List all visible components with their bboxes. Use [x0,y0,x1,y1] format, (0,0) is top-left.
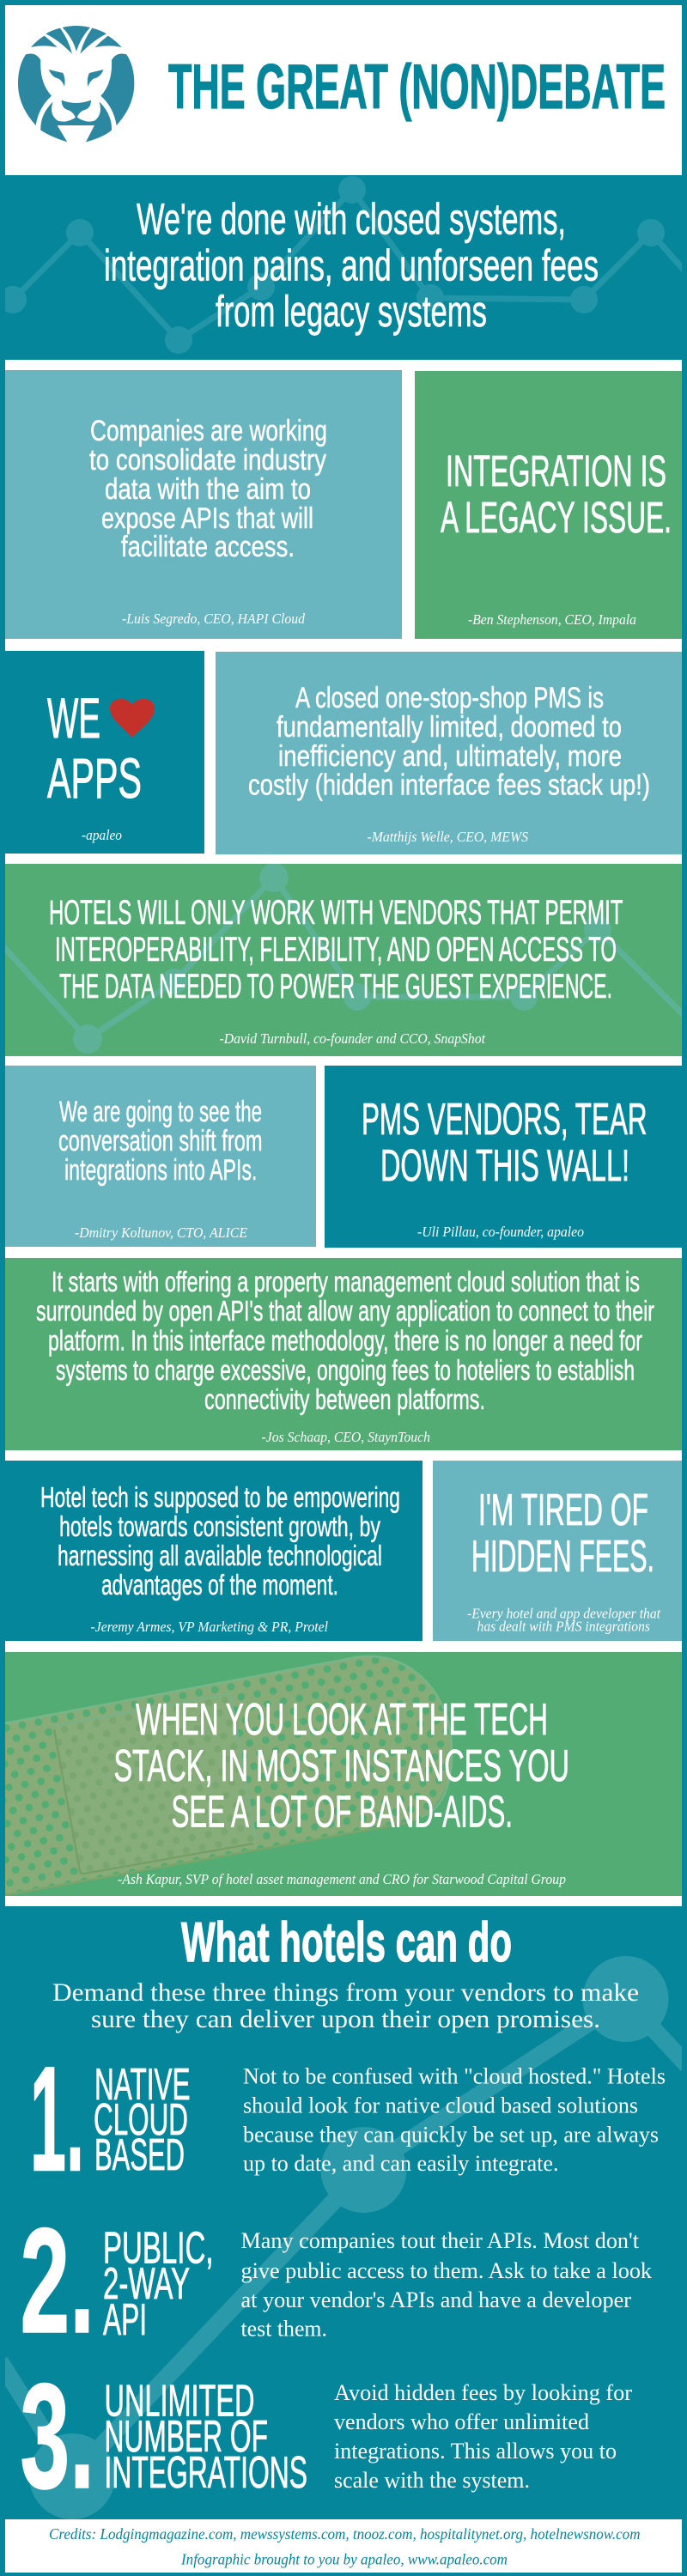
item heading: 2-WAY [103,2259,190,2309]
quote text: harnessing all available technological [58,1540,382,1571]
panel: Uli Pillau quote [325,1066,682,1248]
item description: because they can quickly be set up, are always [243,2123,659,2147]
quote text [441,447,672,542]
icon: band-aid [0,1656,452,1896]
heading: What hotels can do [181,1911,512,1973]
item heading: NUMBER OF [105,2412,268,2462]
header panel [5,5,682,175]
item description: scale with the system. [334,2468,530,2493]
quote text: data with the aim to [105,473,311,506]
quote text: WE [47,686,100,750]
item 1: native cloud based: 1. [30,2035,84,2202]
quote text: advantages of the moment. [101,1569,338,1601]
quote text: integrations into APIs. [64,1154,258,1187]
attribution: -Luis Segredo, CEO, HAPI Cloud [122,611,305,627]
item description: Many companies tout their APIs. Most don't [240,2228,640,2253]
attribution [467,1606,661,1635]
panel: hidden fees quote [433,1461,682,1641]
attribution: has dealt with PMS integrations [477,1618,650,1635]
number 2: 2. [21,2196,94,2364]
attribution: -Jeremy Armes, VP Marketing & PR, Protel [91,1619,328,1635]
attribution: -Ben Stephenson, CEO, Impala [468,611,636,628]
credits text: Credits: Lodgingmagazine.com, mewssystems.com, tnooz.com, hospitalitynet.org, hotelnewsnow.com [49,2525,641,2543]
item description: should look for native cloud based solutions [243,2093,638,2117]
quote text: to consolidate industry [89,444,326,477]
quote text [248,682,650,802]
item heading: BASED [94,2130,185,2180]
item description: Avoid hidden fees by looking for [334,2380,632,2405]
quote text [89,415,327,563]
quote text: conversation shift from [58,1125,263,1157]
panel: Ben Stephenson quote [415,371,682,639]
panel: band-aids quote [0,1652,682,1896]
item description: integrations. This allows you to [334,2439,617,2464]
attribution: -Matthijs Welle, CEO, MEWS [368,829,528,845]
item 2: public 2-way API [21,2196,652,2364]
item description [334,2380,632,2493]
item heading: CLOUD [94,2095,188,2145]
attribution: -Uli Pillau, co-founder, apaleo [417,1224,584,1240]
item heading [94,2060,191,2180]
item description: test them. [240,2317,327,2341]
item description: Not to be confused with "cloud hosted." Hotels [243,2064,666,2088]
panel: Jos Schaap quote [5,1258,682,1450]
quote text [471,1485,654,1582]
quote text: inefficiency and, ultimately, more [278,740,622,773]
quote text: APPS [47,746,142,810]
panel: David Turnbull quote [0,863,687,1056]
attribution: -Jos Schaap, CEO, StaynTouch [261,1429,430,1445]
number 3: 3. [21,2352,94,2519]
quote text: facilitate access. [121,531,295,563]
item 3: unlimited integrations [21,2352,632,2519]
panel: Dmitry Koltunov quote [5,1066,316,1247]
quote text: Companies are working [90,415,327,447]
attribution: -Dmitry Koltunov, CTO, ALICE [75,1224,248,1241]
quote text [49,894,623,1005]
intro text: Demand these three things from your vendors to make [52,1978,639,2007]
brought-by text: Infographic brought to you by apaleo, www.apaleo.com [180,2550,508,2567]
panel: intro banner [0,175,687,360]
icon: lion logo [18,26,134,142]
item heading: UNLIMITED [105,2377,254,2427]
panel: Matthijs Welle quote [216,652,682,854]
icon: heart [110,699,155,738]
intro text [52,1978,639,2033]
intro text: sure they can deliver upon their open promises. [91,2005,600,2033]
quote text [36,1266,654,1415]
attribution: -apaleo [82,827,122,843]
item description: vendors who offer unlimited [334,2409,589,2434]
item heading: PUBLIC, [103,2224,213,2274]
quote text [40,1481,400,1601]
quote text: hotels towards consistent growth, by [59,1510,380,1542]
item description: give public access to them. Ask to take a look [240,2258,652,2283]
quote text: connectivity between platforms. [204,1383,485,1415]
item heading: INTEGRATIONS [105,2448,307,2498]
item heading: API [103,2295,147,2345]
item description [240,2228,652,2341]
item heading: NATIVE [94,2060,191,2110]
quote text: Hotel tech is supposed to be empowering [40,1481,400,1513]
panel: credits [5,2519,682,2573]
item description: up to date, and can easily integrate. [243,2151,558,2176]
panel: what hotels can do [0,1906,687,2519]
intro text: from legacy systems [216,287,487,336]
attribution: -Ash Kapur, SVP of hotel asset management and CRO for Starwood Capital Group [118,1871,566,1887]
panel: we love apps [0,651,204,854]
attribution: -Every hotel and app developer that [467,1606,661,1621]
attribution: -David Turnbull, co-founder and CCO, SnapShot [220,1030,486,1047]
panel: Luis Segredo quote [5,370,402,639]
item description [243,2064,666,2176]
quote text [113,1695,569,1838]
item description: at your vendor's APIs and have a developer [240,2287,631,2312]
quote text [362,1095,647,1191]
panel: Jeremy Armes quote [0,1461,423,1641]
item heading [105,2377,307,2498]
quote text: expose APIs that will [101,502,313,535]
quote text: We are going to see the [59,1096,262,1128]
item 1: native cloud based [30,2035,666,2202]
quote text [58,1096,263,1187]
item heading [103,2224,213,2345]
intro text [104,194,599,336]
